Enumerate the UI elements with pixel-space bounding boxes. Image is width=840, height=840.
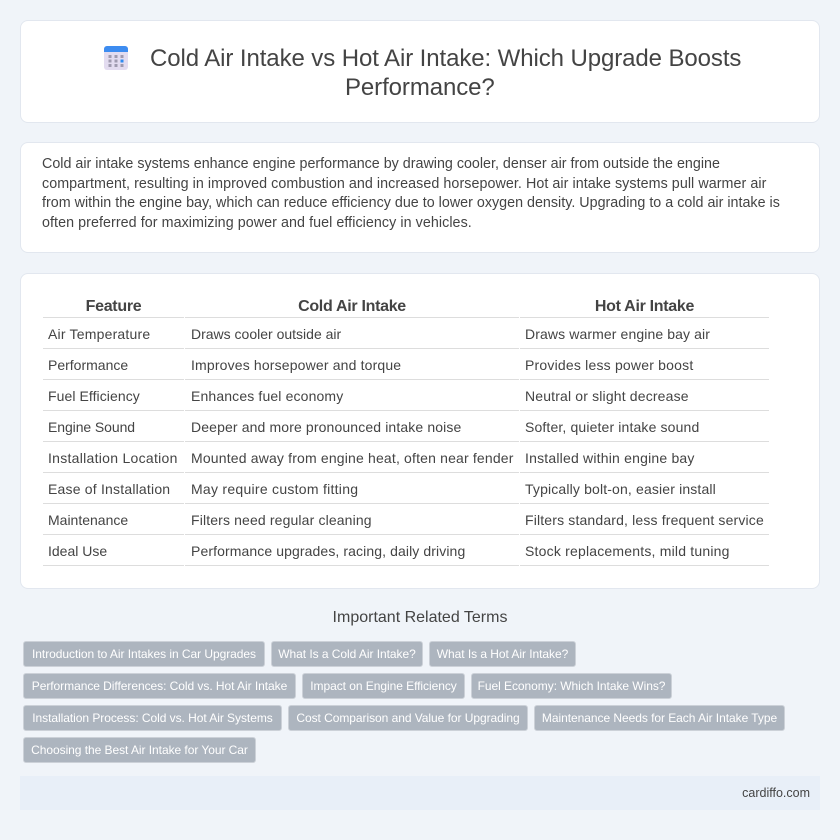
table header: Cold Air Intake: [298, 298, 406, 315]
row: ideal use: Stock replacements, mild tuning: [525, 543, 730, 559]
row: performance: Performance: [48, 357, 128, 373]
title: [150, 45, 741, 101]
row: ease of installation: Typically bolt-on, easier install: [525, 481, 716, 497]
row: engine sound: Deeper and more pronounced intake noise: [191, 419, 461, 435]
row: fuel efficiency: Fuel Efficiency: [48, 388, 140, 404]
row: performance: [48, 357, 694, 373]
tag: Introduction to Air Intakes in Car Upgrades: [32, 647, 256, 661]
tag: [271, 641, 423, 667]
row: installation location: Mounted away from engine heat, often near fender: [191, 450, 514, 466]
row: performance: Improves horsepower and torque: [191, 357, 401, 373]
tag: Choosing the Best Air Intake for Your Car: [31, 743, 248, 757]
icon: calendar: [104, 46, 128, 70]
row: performance: Provides less power boost: [525, 357, 693, 373]
row: maintenance: Filters need regular cleaning: [191, 512, 372, 528]
row: maintenance: [48, 512, 764, 528]
row: ideal use: [48, 543, 730, 559]
tag: [471, 673, 672, 699]
tag: [302, 673, 465, 699]
table header: Feature: [86, 298, 141, 315]
tag: Fuel Economy: Which Intake Wins?: [478, 679, 665, 693]
row: engine sound: [48, 419, 699, 435]
intro paragraph: compartment, resulting in improved combustion and increased horsepower. Hot air intake systems pull warmer air: [42, 176, 766, 192]
row: fuel efficiency: Enhances fuel economy: [191, 388, 343, 404]
tag: [23, 705, 282, 731]
title: Cold Air Intake vs Hot Air Intake: Which Upgrade Boosts: [150, 45, 741, 72]
tag: Installation Process: Cold vs. Hot Air Systems: [32, 711, 273, 725]
footer site name: cardiffo.com: [742, 786, 810, 800]
table header: [86, 298, 694, 315]
tag: [534, 705, 785, 731]
row: fuel efficiency: Neutral or slight decrease: [525, 388, 689, 404]
row: air temperature: Air Temperature: [48, 326, 150, 342]
row: air temperature: Draws cooler outside air: [191, 326, 341, 342]
intro paragraph: Cold air intake systems enhance engine performance by drawing cooler, denser air from outside the engine: [42, 156, 720, 172]
tag: Cost Comparison and Value for Upgrading: [296, 711, 520, 725]
tag: Maintenance Needs for Each Air Intake Type: [542, 711, 777, 725]
tag: [23, 641, 265, 667]
panel: introduction text: [20, 142, 820, 253]
row: ease of installation: Ease of Installation: [48, 481, 170, 497]
intro paragraph: [42, 156, 780, 230]
row: ease of installation: [48, 481, 716, 497]
row: installation location: Installed within engine bay: [525, 450, 695, 466]
tag: Performance Differences: Cold vs. Hot Air Intake: [32, 679, 287, 693]
title: Performance?: [345, 74, 495, 101]
tag: [429, 641, 576, 667]
panel: title header: [20, 20, 820, 123]
row: air temperature: Draws warmer engine bay air: [525, 326, 710, 342]
row: ideal use: Performance upgrades, racing, daily driving: [191, 543, 465, 559]
row: maintenance: Filters standard, less frequent service: [525, 512, 764, 528]
tag: Impact on Engine Efficiency: [310, 679, 457, 693]
row: ease of installation: May require custom fitting: [191, 481, 358, 497]
row: installation location: Installation Location: [48, 450, 178, 466]
row: installation location: [48, 450, 695, 466]
row: engine sound: Softer, quieter intake sound: [525, 419, 699, 435]
tag: [23, 673, 296, 699]
footer bar: [20, 776, 820, 810]
row: engine sound: Engine Sound: [48, 419, 135, 435]
intro paragraph: often preferred for maximizing power and fuel efficiency in vehicles.: [42, 214, 472, 230]
panel: comparison table: [20, 273, 820, 589]
tag: What Is a Cold Air Intake?: [278, 647, 416, 661]
tag: [23, 737, 256, 763]
tag: What Is a Hot Air Intake?: [437, 647, 568, 661]
row: ideal use: Ideal Use: [48, 543, 107, 559]
heading: related terms: Important Related Terms: [333, 609, 507, 626]
row: maintenance: Maintenance: [48, 512, 128, 528]
table header: Hot Air Intake: [595, 298, 694, 315]
intro paragraph: from within the engine bay, which can reduce efficiency due to lower oxygen density. Upgrading to a cold air intake is: [42, 195, 780, 211]
tag: [288, 705, 528, 731]
row: fuel efficiency: [48, 388, 689, 404]
row: air temperature: [48, 326, 710, 342]
related term tags: [23, 641, 785, 763]
